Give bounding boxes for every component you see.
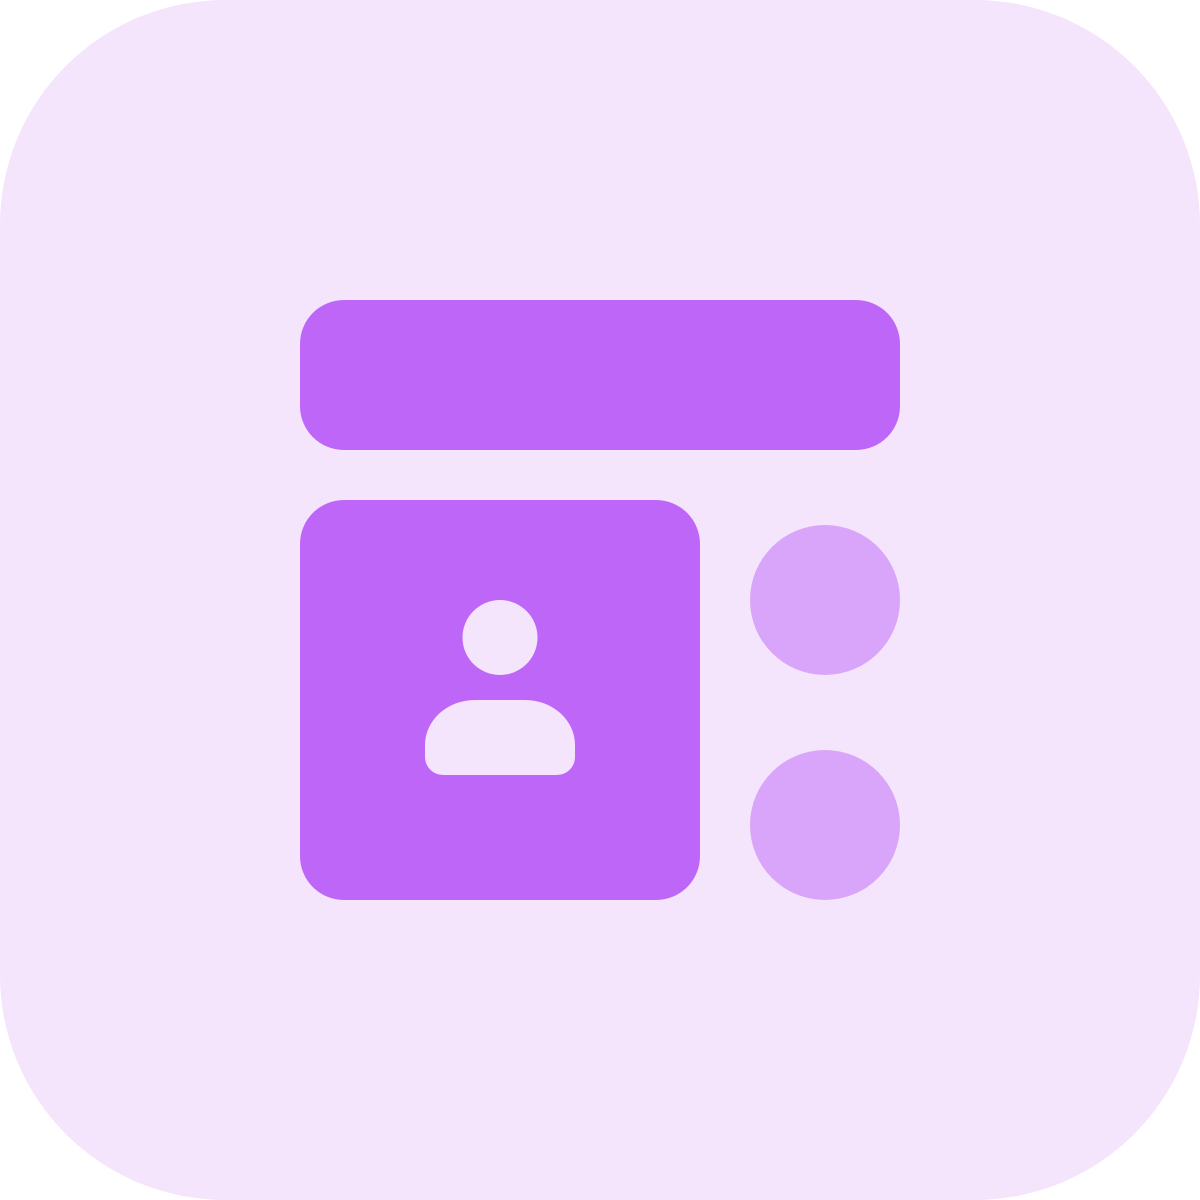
profile card: [300, 500, 700, 900]
header bar: [300, 300, 900, 450]
dots: [750, 525, 900, 900]
icon: person: [425, 600, 575, 775]
